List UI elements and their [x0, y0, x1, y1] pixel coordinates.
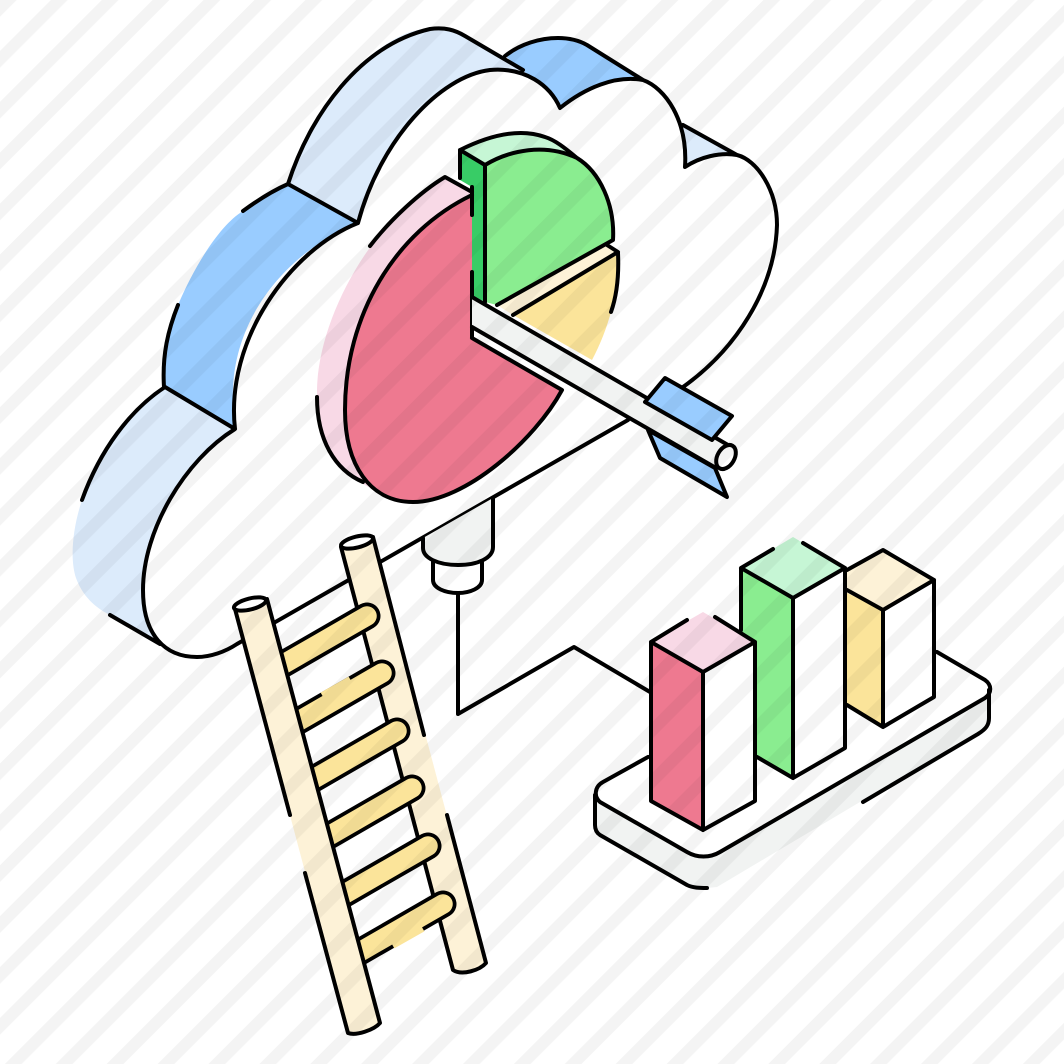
- connector plug: [423, 498, 493, 593]
- arrow: shaft edges: [472, 297, 728, 468]
- pie: yellow slice: [513, 254, 618, 360]
- platform top: [596, 652, 990, 856]
- pie: green slice top: [460, 133, 577, 165]
- pie: yellow outlines: [513, 245, 618, 315]
- plug upper grey part: [423, 498, 493, 565]
- cloud: [73, 28, 777, 657]
- bar: yellow: [847, 550, 934, 727]
- connector wire: [458, 593, 650, 714]
- cloud front face: [143, 70, 777, 657]
- ladder right rail: [340, 533, 486, 972]
- arrow: lower fletching: [648, 430, 727, 497]
- arrow: shaft: [472, 297, 728, 469]
- cloud side: blue segment: [164, 184, 358, 429]
- arrow: upper fletching: [645, 378, 732, 440]
- bar chart on platform: [595, 537, 990, 888]
- plug lower white part: [433, 560, 482, 593]
- bar: green: [741, 537, 845, 778]
- ladder left rail: [233, 595, 380, 1034]
- pie: green slice: [485, 150, 613, 305]
- cloud side: left light blue: [73, 387, 235, 644]
- cloud outlines: [82, 28, 777, 657]
- platform outlines: [595, 652, 990, 888]
- ladder rungs: [282, 616, 443, 953]
- pie: pink outlines: [317, 177, 562, 502]
- cloud side: top right blue: [505, 38, 643, 108]
- pie: yellow slice side: [497, 245, 618, 315]
- pie: green slice side: [460, 150, 485, 302]
- arrow: [472, 297, 740, 497]
- platform side: [595, 690, 989, 888]
- cloud side: small right triangle: [683, 125, 737, 167]
- ladder: [233, 533, 486, 1034]
- bar: pink: [651, 612, 755, 830]
- pie: pink slice side: [317, 177, 472, 490]
- pie: green outlines: [460, 133, 613, 305]
- pie: pink slice: [345, 195, 562, 502]
- arrow: shaft end: [712, 441, 740, 473]
- pie chart: [317, 133, 618, 502]
- cloud side: top light blue: [288, 28, 530, 223]
- plug outline: [423, 498, 493, 565]
